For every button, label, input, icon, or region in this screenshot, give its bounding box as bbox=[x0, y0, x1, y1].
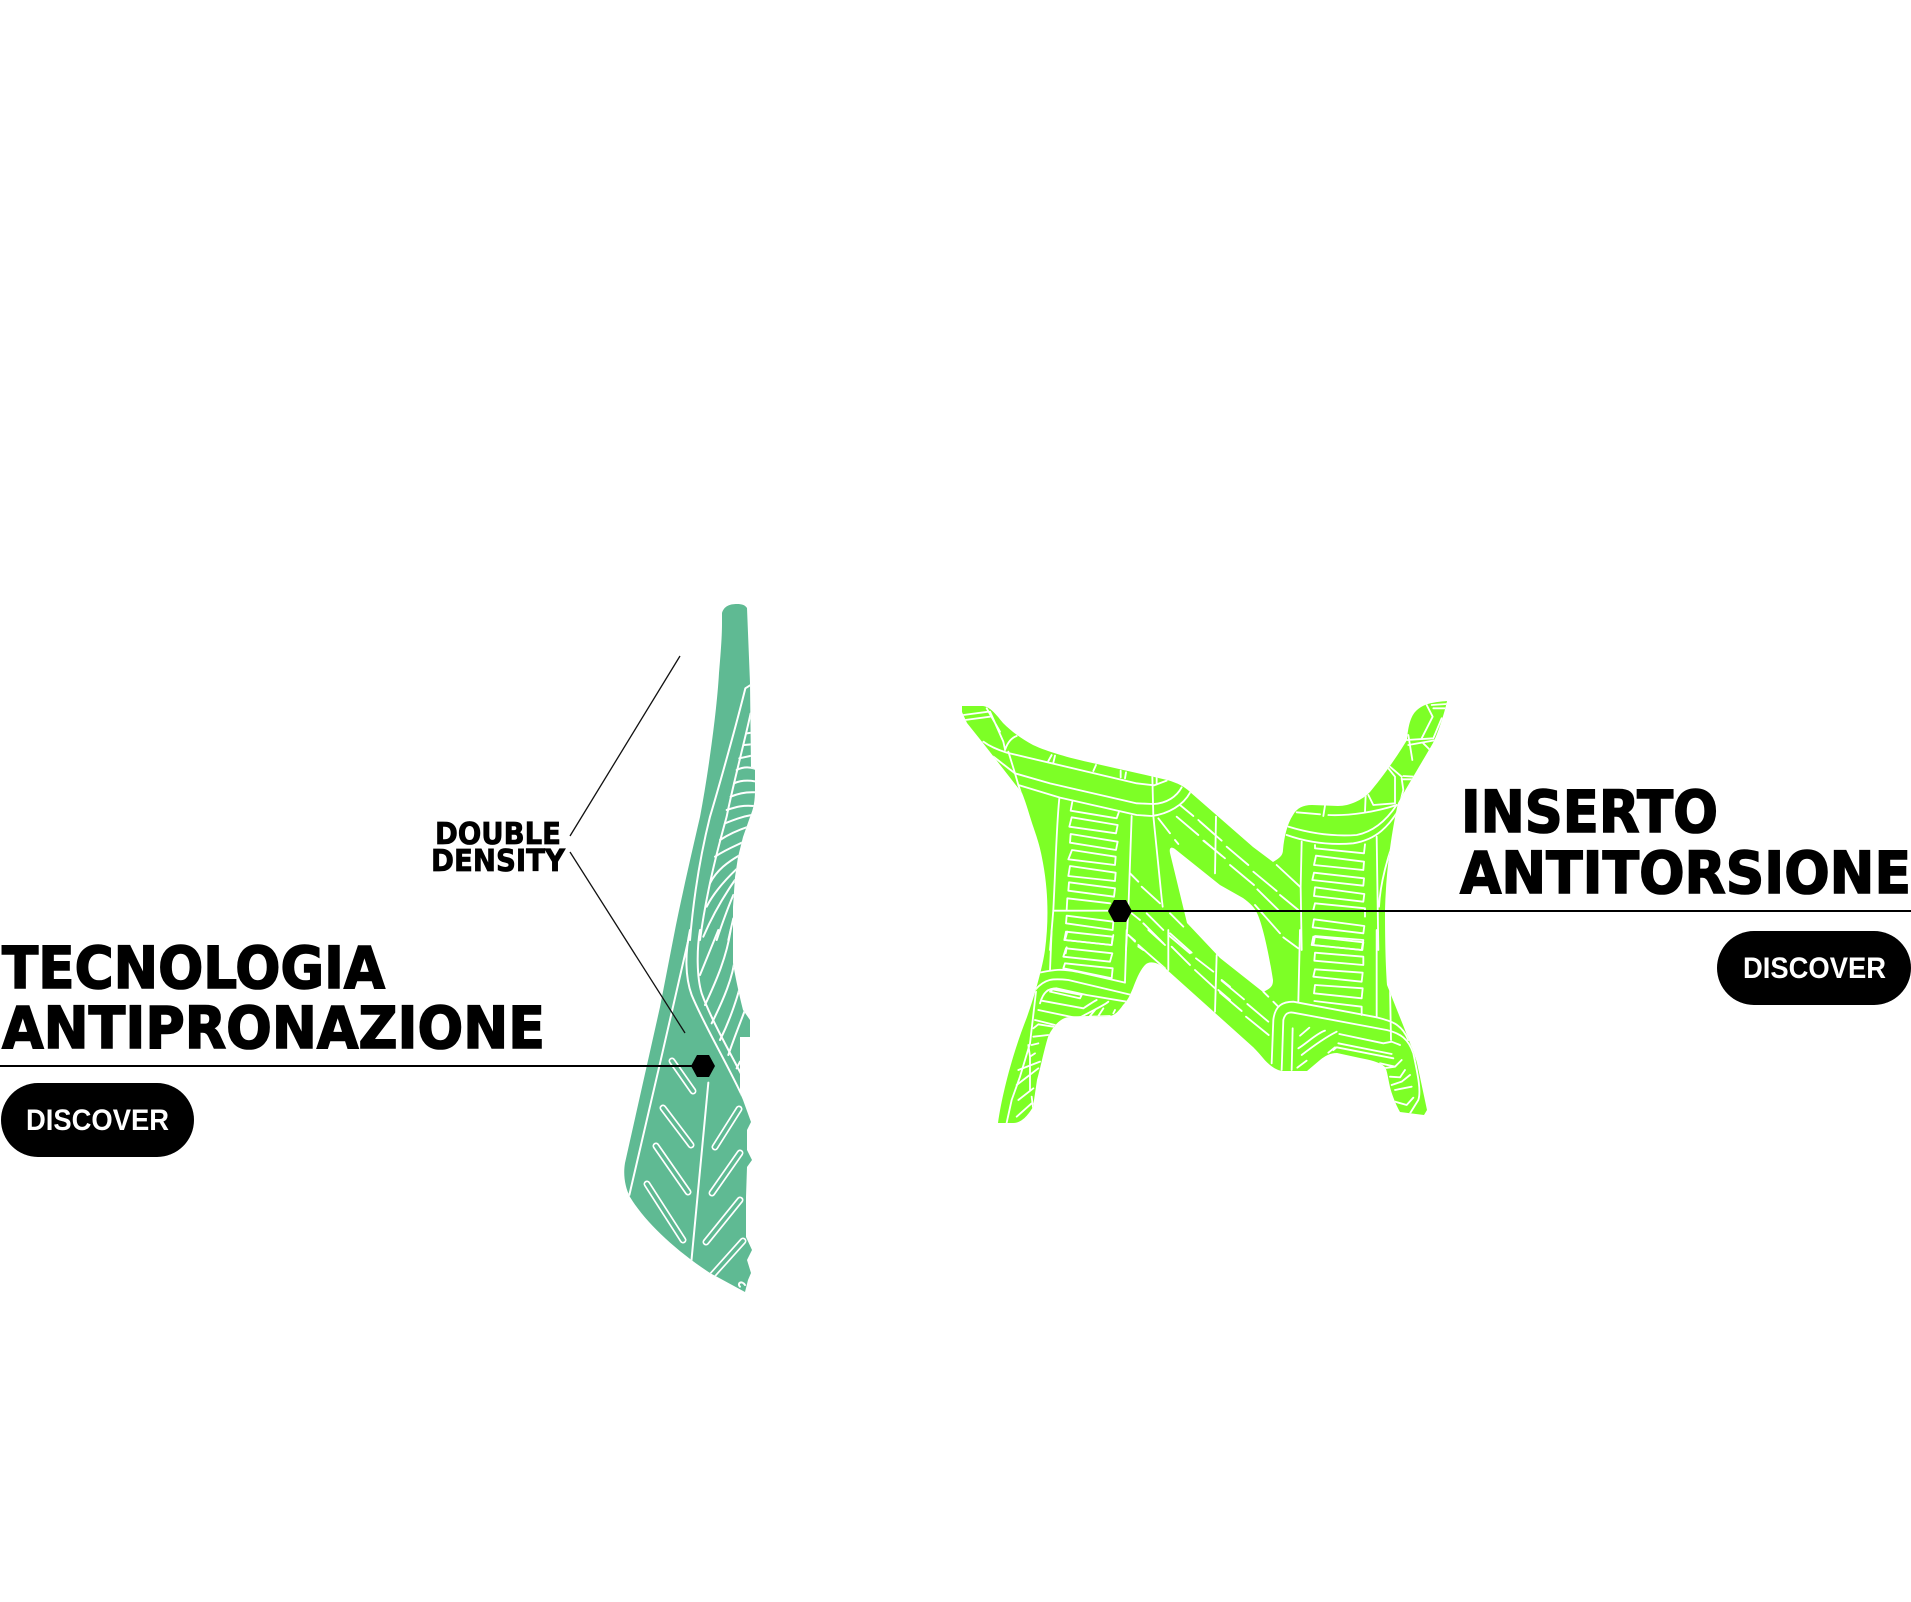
leader line and marker: anti-torsion bbox=[1108, 900, 1911, 922]
shape: antipronation sole section bbox=[624, 604, 757, 1292]
leader line and marker: antipronation bbox=[0, 1055, 715, 1077]
button: discover left: DISCOVER bbox=[26, 1104, 169, 1137]
button: discover right bbox=[1717, 931, 1911, 1005]
shape: anti-torsion insert bbox=[962, 701, 1447, 1123]
button: discover right: DISCOVER bbox=[1743, 952, 1886, 985]
label: double density: DOUBLE bbox=[435, 817, 561, 852]
heading: tecnologia antipronazione bbox=[2, 934, 545, 1062]
button: discover left bbox=[1, 1083, 194, 1157]
callout lines: double density bbox=[570, 656, 685, 1033]
heading: inserto antitorsione: INSERTO bbox=[1461, 778, 1718, 846]
heading: tecnologia antipronazione: TECNOLOGIA bbox=[2, 934, 385, 1002]
label: double density bbox=[431, 817, 566, 879]
heading: inserto antitorsione bbox=[1460, 778, 1911, 907]
label: double density: DENSITY bbox=[431, 844, 566, 879]
heading: tecnologia antipronazione: ANTIPRONAZIONE bbox=[2, 994, 545, 1062]
lozenge grooves bbox=[647, 1061, 743, 1280]
